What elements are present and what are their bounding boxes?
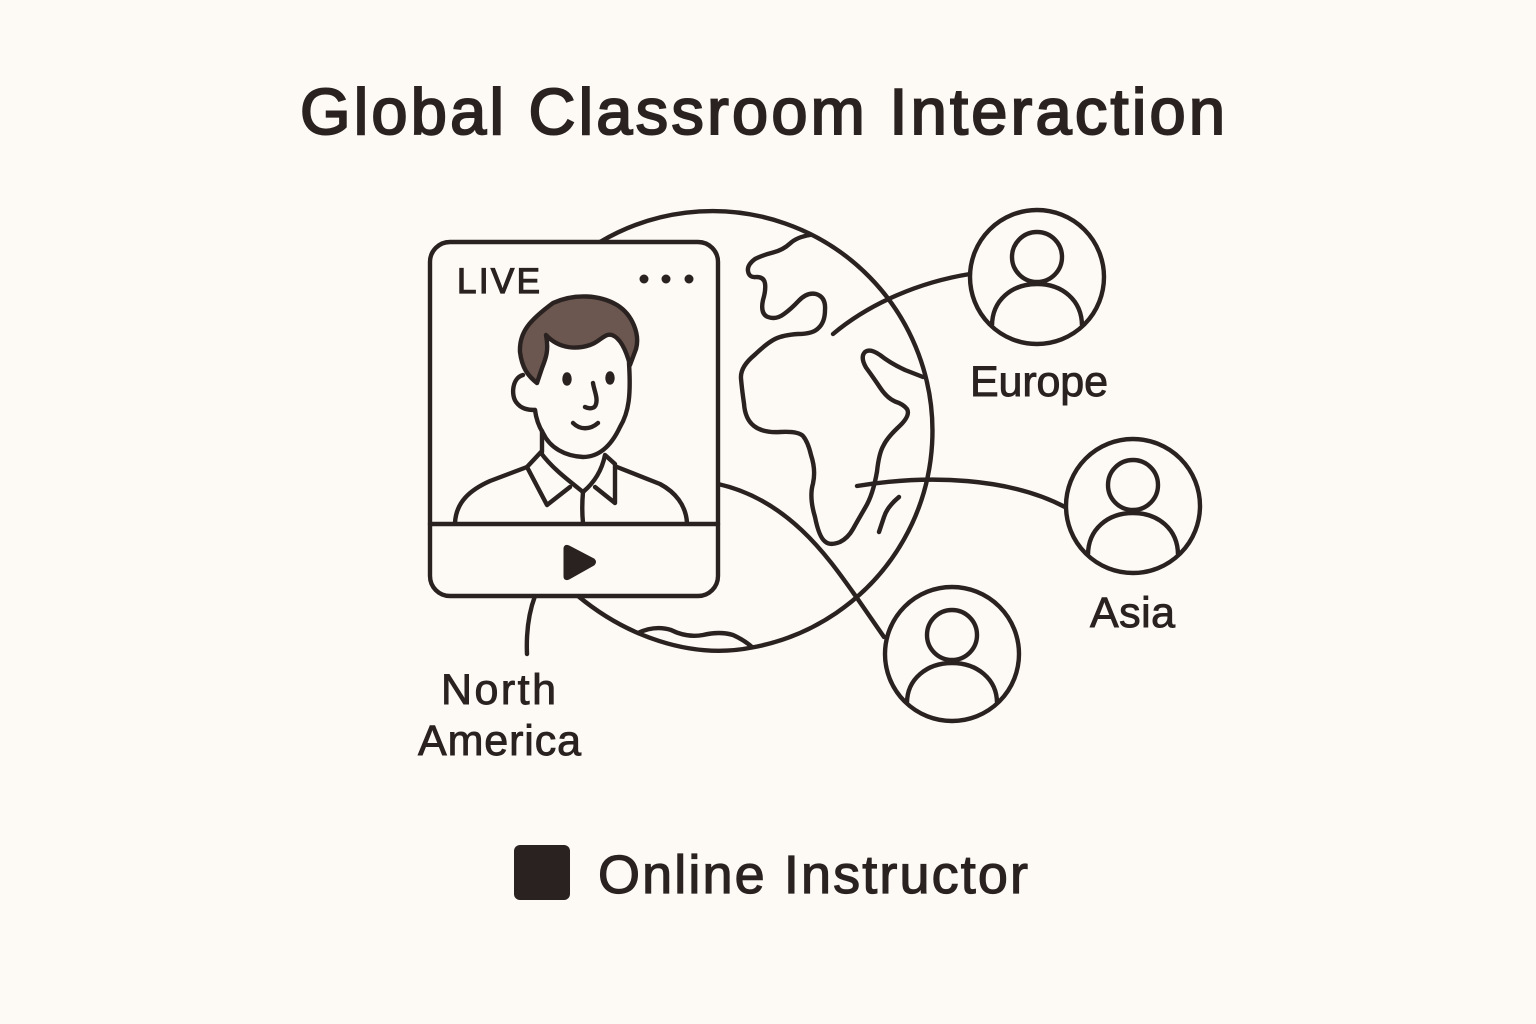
connection line: Asia (857, 480, 1065, 507)
hair (520, 296, 637, 383)
card frame (430, 242, 718, 596)
label: North America: North (441, 666, 556, 714)
ear (513, 375, 535, 410)
student: Asia (1066, 439, 1200, 573)
label: North America (418, 666, 581, 765)
connection line: North America (527, 596, 535, 654)
label: Europe: Europe (970, 358, 1108, 406)
label: Asia: Asia (1090, 589, 1175, 637)
shirt placket (580, 492, 585, 523)
left eye (564, 374, 570, 384)
right eye (608, 374, 612, 382)
nose (585, 383, 597, 408)
panel: live video card (430, 242, 718, 596)
menu dots (640, 274, 694, 284)
neck (540, 431, 544, 452)
smile (573, 423, 598, 428)
face outline (535, 363, 630, 457)
play button (564, 545, 596, 580)
title: Global Classroom Interaction (300, 75, 1225, 148)
continents: Europe and Africa (741, 235, 923, 544)
instructor portrait (455, 296, 687, 523)
island: Madagascar (879, 497, 899, 532)
student: Europe (970, 210, 1104, 344)
label: North America: America (418, 717, 581, 765)
control bar divider (430, 522, 718, 526)
shoulders (455, 467, 687, 523)
connection line: instructor to lower student (718, 484, 884, 637)
continent: bottom landmass (638, 628, 752, 647)
student: lower (885, 587, 1019, 721)
live label: LIVE (457, 262, 540, 301)
legend label: Online Instructor (598, 845, 1028, 905)
globe (578, 211, 932, 651)
connection line: Europe (833, 274, 970, 334)
globe outline (578, 211, 932, 651)
legend swatch (514, 845, 570, 900)
collar (527, 452, 615, 505)
